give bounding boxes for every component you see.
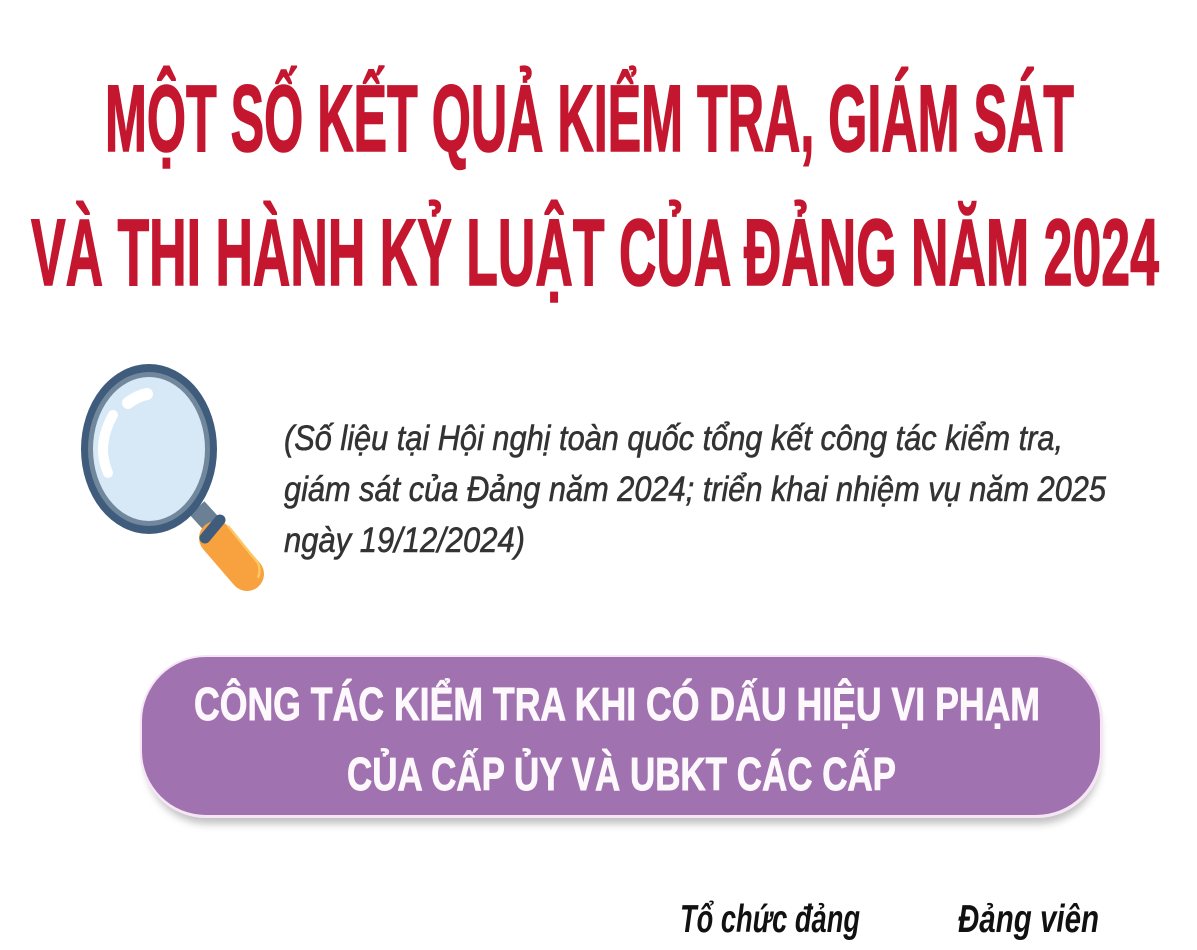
source note	[284, 419, 1106, 560]
column label: party members: Đảng viên	[958, 898, 1099, 941]
title	[31, 66, 1159, 306]
section banner	[140, 655, 1103, 824]
banner heading: CỦA CẤP ỦY VÀ UBKT CÁC CẤP	[347, 748, 896, 800]
banner heading	[194, 678, 1040, 800]
source note: (Số liệu tại Hội nghị toàn quốc tổng kết công tác kiểm tra,	[284, 419, 1063, 458]
source note: ngày 19/12/2024)	[284, 521, 525, 560]
source note: giám sát của Đảng năm 2024; triển khai nhiệm vụ năm 2025	[284, 470, 1106, 509]
icon: magnifying glass	[81, 364, 260, 578]
column label: party organisations: Tổ chức đảng	[680, 898, 860, 941]
